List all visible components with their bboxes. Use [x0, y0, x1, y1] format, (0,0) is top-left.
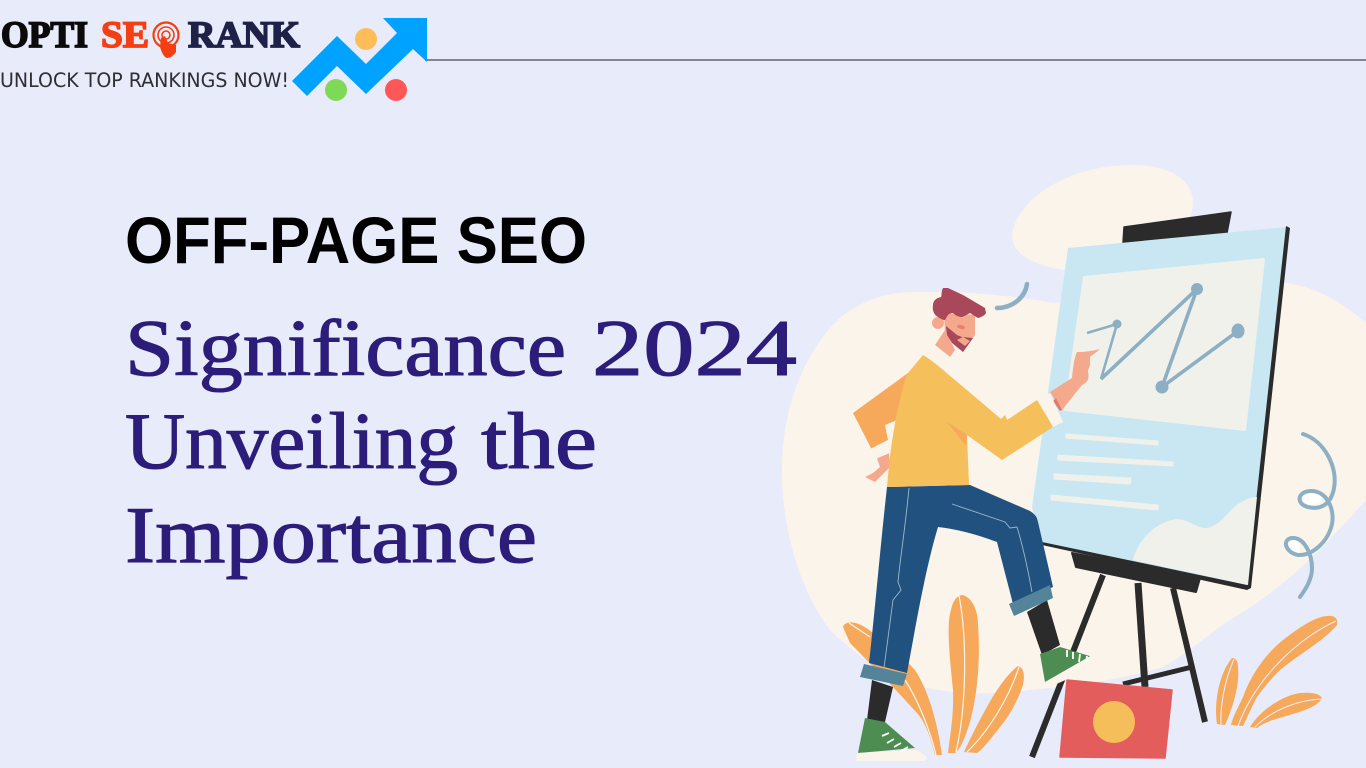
decorative arc [997, 284, 1027, 308]
logo dots [325, 28, 407, 101]
heading: off-page seo: OFF-PAGE SEO [125, 203, 587, 277]
icon: target with pointer [154, 22, 178, 58]
trousers [869, 485, 1053, 673]
bottom wave [1133, 497, 1257, 585]
shoe: front [1040, 647, 1112, 688]
subtitle [125, 305, 797, 580]
subtitle: the [481, 398, 597, 486]
logo wordmark [1, 15, 300, 56]
sweater [887, 355, 1053, 487]
trouser seams [884, 488, 1032, 668]
beard [946, 326, 973, 352]
front hand and forearm [1050, 349, 1100, 411]
plants: left [843, 595, 1024, 755]
logo wordmark: SE [101, 15, 149, 56]
collar [925, 345, 955, 375]
shoe: rear [856, 718, 927, 761]
red box [1060, 680, 1172, 758]
background blob: main [782, 283, 1366, 693]
background blob: top [1012, 165, 1193, 270]
tagline: UNLOCK TOP RANKINGS NOW! [0, 69, 289, 92]
front cuff [1038, 393, 1063, 427]
chart panel [1065, 259, 1264, 430]
head [932, 288, 986, 352]
text lines [1051, 434, 1173, 510]
subtitle: Unveiling [125, 398, 458, 486]
illustration [782, 165, 1366, 761]
icon: rising arrow [292, 18, 427, 96]
back arm [853, 373, 908, 450]
easel legs [1032, 575, 1205, 757]
subtitle: 2024 [592, 305, 797, 393]
presentation board [1032, 226, 1290, 590]
back cuff [868, 440, 892, 460]
logo [0, 15, 427, 101]
trouser cuffs [860, 585, 1053, 686]
back hand [865, 453, 890, 482]
subtitle: Importance [125, 492, 537, 580]
plants: right [1216, 616, 1337, 728]
socks [867, 600, 1060, 722]
logo wordmark: OPTI [1, 15, 88, 56]
neck [935, 330, 955, 357]
subtitle: Significance [125, 305, 566, 393]
board clip [1123, 212, 1231, 243]
crotch shadow [936, 510, 945, 527]
line chart [1087, 283, 1244, 394]
sweater shadow [947, 422, 967, 446]
character [853, 288, 1112, 761]
decorative squiggle [1283, 434, 1335, 597]
easel tray [1072, 553, 1200, 592]
logo wordmark: RANK [188, 15, 300, 56]
hair [933, 288, 986, 320]
